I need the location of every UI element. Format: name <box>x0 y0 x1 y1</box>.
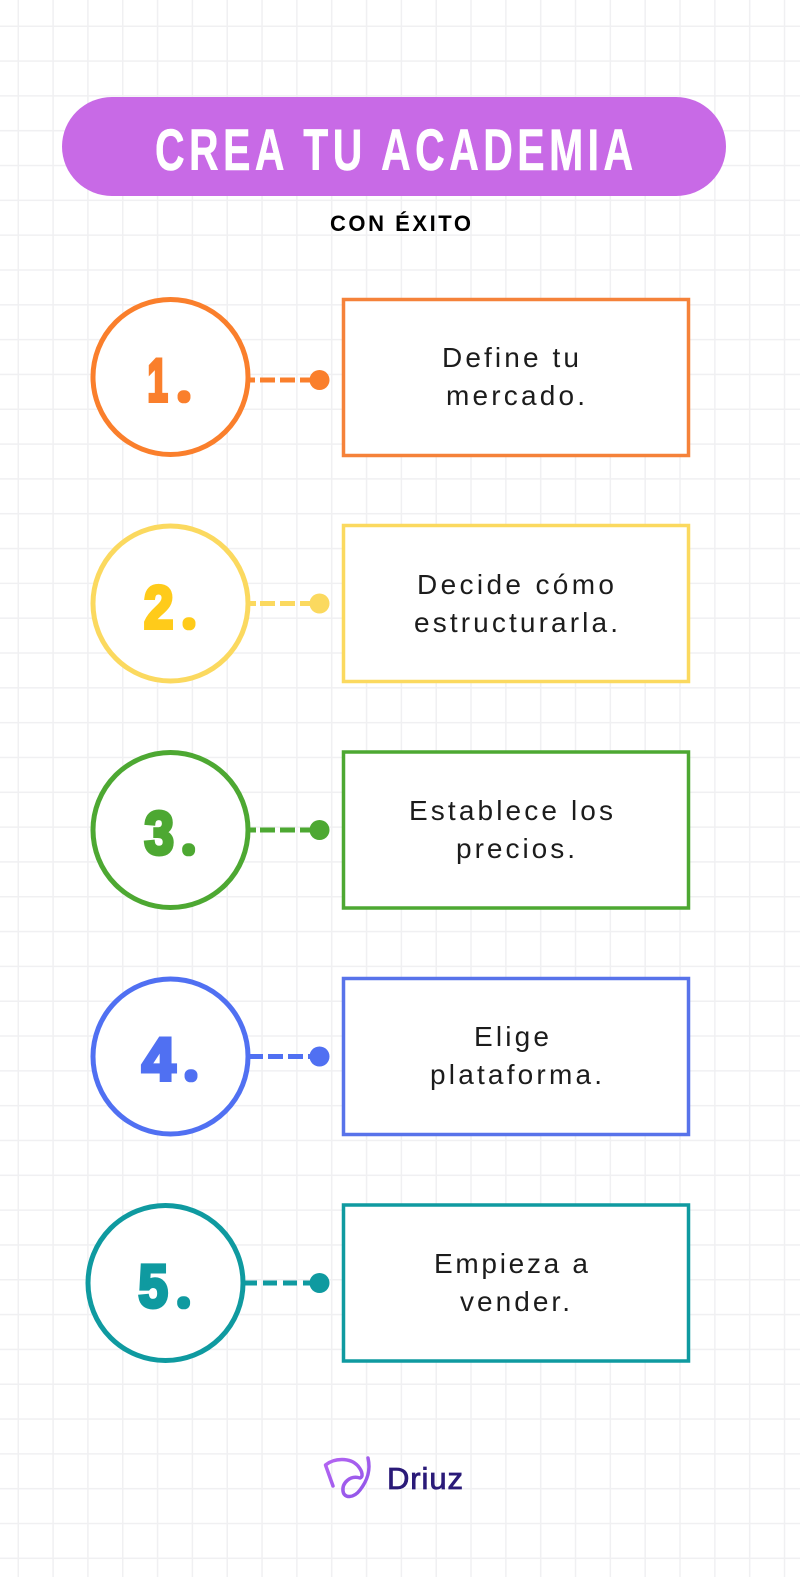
logo <box>326 1458 463 1497</box>
title: CREA TU ACADEMIA <box>155 117 633 183</box>
step 4 <box>93 978 688 1134</box>
step 2 number circle: . <box>188 617 191 628</box>
step 1 card: Define tu <box>442 342 579 373</box>
step 1 number circle: 1 <box>148 347 168 414</box>
step 2 number circle <box>93 526 248 681</box>
step 1 connector <box>250 370 330 390</box>
step 1 card: mercado. <box>446 380 585 411</box>
step 4 card: Elige <box>474 1021 549 1052</box>
step 5 number circle <box>88 1206 243 1360</box>
title banner <box>62 97 726 196</box>
step 1 card <box>344 300 688 456</box>
step 4 connector <box>250 1046 330 1066</box>
step 2 card: Decide cómo <box>417 569 614 600</box>
subtitle: CON ÉXITO <box>330 211 471 236</box>
logo wordmark: Driuz <box>387 1461 463 1496</box>
step 3 number circle <box>93 752 248 908</box>
step 2 card <box>344 526 688 682</box>
step 5 card: Empieza a <box>434 1248 588 1279</box>
step 3 card: precios. <box>456 833 575 864</box>
step 3 number circle: 3 <box>144 800 174 867</box>
step 4 card <box>344 978 688 1134</box>
step 2 number circle: 2 <box>144 574 173 641</box>
step 1 number circle: . <box>183 390 186 401</box>
step 3 card <box>344 752 688 908</box>
step 3 connector <box>250 820 330 840</box>
step 1 <box>93 300 688 456</box>
step 3 card: Establece los <box>409 795 613 826</box>
step 4 card: plataforma. <box>430 1059 602 1090</box>
step 5 number circle: . <box>182 1296 185 1307</box>
step 2 connector <box>250 594 330 614</box>
step 3 number circle: . <box>187 843 190 854</box>
step 2 card: estructurarla. <box>414 607 618 638</box>
step 5 number circle: 5 <box>138 1253 168 1320</box>
step 2 <box>93 526 688 682</box>
step 5 connector <box>245 1273 330 1293</box>
step 1 number circle <box>93 300 248 454</box>
step 5 <box>88 1205 688 1361</box>
step 4 number circle: . <box>190 1069 193 1080</box>
icon: Driuz logo mark <box>326 1458 369 1497</box>
step 3 <box>93 752 688 908</box>
step 4 number circle <box>93 979 248 1134</box>
step 4 number circle: 4 <box>142 1026 176 1093</box>
step 5 card: vender. <box>460 1286 570 1317</box>
step 5 card <box>344 1205 688 1361</box>
